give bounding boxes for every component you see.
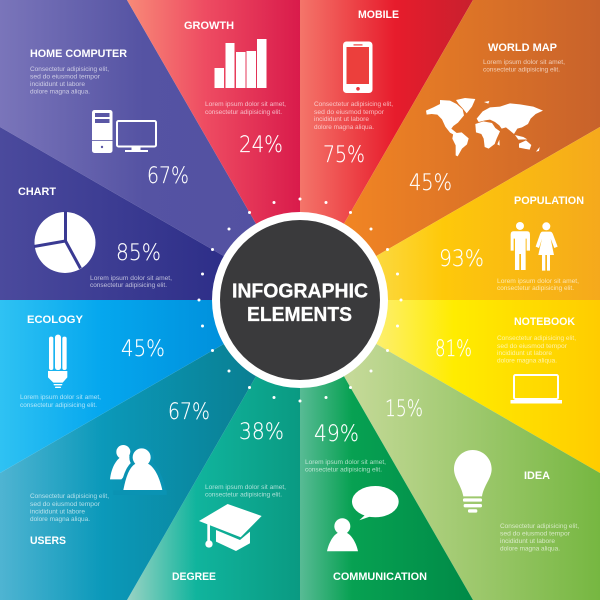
panel: world map wedge	[300, 0, 600, 300]
icon: phone	[343, 42, 372, 93]
panel: communication wedge	[300, 300, 473, 600]
communication content: 49%	[314, 422, 359, 447]
home computer content: 67%	[147, 164, 189, 189]
chart content	[18, 186, 172, 289]
idea content: IDEA	[524, 470, 550, 482]
ecology content	[20, 314, 165, 409]
growth content: 24%	[239, 133, 283, 158]
users content: Consectetur adipisicing elit,	[30, 493, 109, 500]
chart content: Lorem ipsum dolor sit amet,	[90, 275, 172, 282]
degree content	[172, 420, 286, 583]
idea content: sed do eiusmod tempor	[500, 530, 571, 538]
home computer content: HOME COMPUTER	[30, 48, 127, 60]
panel: idea wedge	[300, 300, 600, 600]
home computer content: incididunt ut labore	[30, 81, 85, 88]
home computer content: dolore magna aliqua.	[30, 88, 90, 96]
panel: mobile wedge	[300, 0, 473, 300]
world map content: Lorem ipsum dolor sit amet,	[483, 59, 565, 66]
notebook content: sed do eiusmod tempor	[497, 343, 568, 350]
mobile content: Consectetur adipisicing elit,	[314, 101, 393, 108]
communication content: consectetur adipisicing elit.	[305, 466, 382, 474]
mobile content: dolore magna aliqua.	[314, 124, 374, 131]
idea content: 15%	[385, 397, 423, 422]
world map content: 45%	[409, 171, 452, 196]
home computer content: Consectetur adipisicing elit,	[30, 66, 109, 73]
icon: light bulb	[454, 450, 492, 513]
chart content: consectetur adipisicing elit.	[90, 282, 167, 289]
icon: bar chart	[214, 39, 266, 88]
idea content: incididunt ut labore	[500, 538, 555, 545]
ecology content: consectetur adipisicing elit.	[20, 402, 97, 409]
panel: degree wedge	[127, 300, 300, 600]
mobile content	[314, 9, 399, 168]
mobile content: sed do eiusmod tempor	[314, 109, 385, 116]
users content: incididunt ut labore	[30, 508, 85, 516]
panel: home computer wedge	[0, 0, 300, 300]
mobile content: MOBILE	[358, 9, 399, 21]
chart content: CHART	[18, 186, 56, 198]
icon: graduation cap	[199, 504, 262, 551]
population content: POPULATION	[514, 195, 584, 207]
communication content: COMMUNICATION	[333, 571, 427, 583]
growth content: Lorem ipsum dolor sit amet,	[205, 101, 286, 108]
users content: dolore magna aliqua.	[30, 516, 90, 523]
icon: speech bubble and person	[327, 486, 399, 551]
mobile content: incididunt ut labore	[314, 116, 369, 123]
icon: world map	[426, 98, 543, 156]
ecology content: ECOLOGY	[27, 314, 84, 326]
degree content: Lorem ipsum dolor sit amet,	[205, 484, 286, 491]
icon: laptop	[510, 375, 562, 404]
population content: consectetur adipisicing elit.	[497, 285, 574, 292]
idea content	[385, 397, 579, 552]
center dots ring	[198, 198, 402, 402]
title: ELEMENTS	[247, 304, 352, 326]
home computer content: sed do eiusmod tempor	[30, 74, 101, 80]
panel: users wedge	[0, 300, 300, 600]
notebook content: Consectetur adipisicing elit,	[497, 335, 576, 342]
population content: 93%	[439, 247, 484, 272]
growth content: GROWTH	[184, 20, 234, 32]
title	[232, 280, 368, 326]
center circle with title	[216, 216, 384, 384]
population content	[439, 195, 584, 292]
icon: pie chart	[34, 211, 96, 273]
notebook content	[435, 316, 576, 404]
panel: ecology wedge	[0, 300, 300, 473]
world map content	[409, 42, 565, 196]
world map content: consectetur adipisicing elit.	[483, 66, 560, 74]
users content: USERS	[30, 535, 66, 547]
icon: energy saving bulb	[48, 335, 67, 388]
panel: notebook wedge	[300, 300, 600, 473]
communication content: Lorem ipsum dolor sit amet,	[305, 459, 386, 466]
users content: 67%	[168, 400, 210, 425]
mobile content: 75%	[323, 143, 365, 168]
users content	[30, 400, 210, 547]
population content: Lorem ipsum dolor sit amet,	[497, 278, 579, 285]
panel: population wedge	[300, 127, 600, 300]
icon: computer	[92, 110, 156, 153]
icon: man and woman	[511, 222, 558, 271]
ecology content: Lorem ipsum dolor sit amet,	[20, 394, 101, 401]
growth content	[184, 20, 286, 158]
communication content	[305, 422, 427, 583]
degree content: consectetur adipisicing elit.	[205, 492, 282, 498]
chart content: 85%	[116, 241, 161, 266]
world map content: WORLD MAP	[488, 42, 557, 54]
title: INFOGRAPHIC	[232, 280, 368, 302]
notebook content: 81%	[435, 337, 472, 362]
notebook content: incididunt ut labore	[497, 350, 552, 357]
degree content: DEGREE	[172, 571, 216, 583]
idea content: Consectetur adipisicing elit,	[500, 523, 579, 530]
notebook content: NOTEBOOK	[514, 316, 575, 328]
degree content: 38%	[239, 420, 284, 445]
growth content: consectetur adipisicing elit.	[205, 109, 282, 116]
panel: growth wedge	[127, 0, 300, 300]
idea content: dolore magna aliqua.	[500, 546, 560, 552]
ecology content: 45%	[121, 337, 165, 362]
home computer content	[30, 48, 189, 189]
notebook content: dolore magna aliqua.	[497, 358, 557, 364]
panel: chart wedge	[0, 127, 300, 300]
users content: sed do eiusmod tempor	[30, 501, 101, 508]
icon: users	[110, 445, 167, 495]
